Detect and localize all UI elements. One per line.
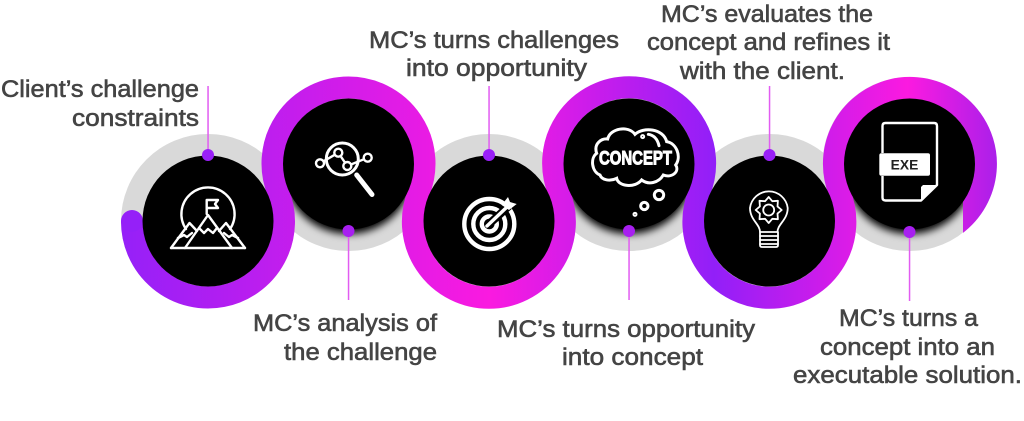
text: step 6 label: concept into an [820,334,995,361]
icon: EXE file: EXE [891,157,918,172]
text: step 4 label [497,316,756,371]
text: step 3 label [369,27,619,82]
text: step 6 label: MC’s turns a [839,305,978,332]
icon: concept thought cloud [593,129,678,215]
text: step 3 label: into opportunity [406,55,588,82]
connector line and dot: step 3 [483,86,495,161]
text: step 3 label: MC’s turns challenges [369,27,619,54]
icon: target with arrow [464,197,517,249]
icon: magnifier with line chart [316,143,372,194]
icon: mountain with flag [171,187,245,248]
text: step 5 label: MC’s evaluates the [661,1,873,28]
connector line and dot: step 4 [623,225,635,300]
icon: EXE file [879,123,937,201]
text: step 6 label [793,305,1022,389]
connector line and dot: step 6 [904,226,916,301]
connector line and dot: step 5 [764,86,776,161]
connector line and dot: step 1 [202,86,214,161]
black step circles [142,98,975,286]
grey backing rings [121,77,996,308]
gradient ribbon [121,87,986,298]
text: step 1 label [1,76,199,132]
text: step 2 label: the challenge [284,339,437,366]
text: step 5 label [647,1,890,85]
text: step 6 label: executable solution. [793,362,1022,389]
text: step 1 label: Client’s challenge [1,76,199,103]
text: step 1 label: constraints [72,105,199,132]
text: step 5 label: with the client. [679,58,845,85]
text: step 4 label: MC’s turns opportunity [497,316,756,343]
text: step 4 label: into concept [562,344,703,371]
icon: light bulb with gear [750,191,788,247]
text: step 2 label: MC’s analysis of [253,310,437,337]
connector line and dot: step 2 [342,225,354,300]
circle shadows [284,104,974,234]
icon: concept thought cloud: CONCEPT [599,148,672,170]
text: step 5 label: concept and refines it [647,29,890,56]
text: step 2 label [253,310,437,366]
